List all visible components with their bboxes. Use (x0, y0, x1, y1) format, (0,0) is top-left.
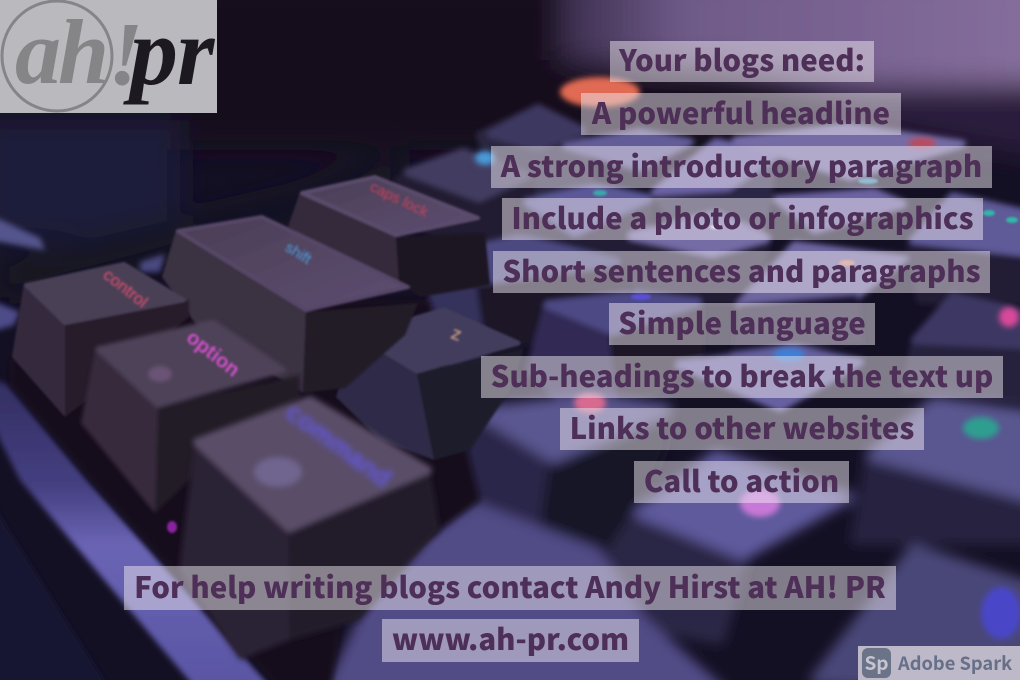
key: shift (162, 217, 418, 393)
logo: ah!pr (0, 0, 217, 113)
blurred background (0, 0, 1020, 300)
item: links: Links to other websites (570, 406, 914, 448)
key: z (336, 310, 524, 460)
key: caps lock (288, 177, 490, 297)
right key field: far row (398, 108, 590, 260)
dark well between keys (10, 300, 480, 680)
badge label: Adobe Spark (898, 650, 1012, 676)
small sharp legends (593, 178, 1018, 300)
key: command (179, 400, 440, 660)
text panel: blog checklist (481, 38, 1003, 503)
legend: z: Z (449, 326, 463, 345)
far-right rows (566, 132, 690, 168)
item: introductory paragraph: A strong introductory paragraph (501, 144, 982, 186)
legend: caps lock: caps lock (367, 178, 431, 221)
legend: control: control (100, 265, 151, 312)
contact line: For help writing blogs contact Andy Hirst at AH! PR (134, 565, 886, 607)
legend: shift: shift (282, 239, 315, 268)
badge: Adobe Spark (858, 646, 1020, 680)
website address: www.ah-pr.com (392, 617, 629, 659)
logo wordmark (15, 0, 216, 105)
blurred coloured legends (475, 77, 1020, 639)
icon: Sp: Sp (864, 649, 889, 676)
key: option (81, 322, 300, 513)
logo wordmark: pr (123, 0, 216, 105)
logo ring (2, 1, 112, 111)
key legends (100, 178, 463, 493)
item: sub-headings: Sub-headings to break the text up (491, 354, 993, 396)
item: photo or infographics: Include a photo or infographics (511, 196, 974, 238)
key: control (12, 264, 189, 417)
legend: command: command (280, 397, 397, 493)
logo wordmark: ! (108, 5, 143, 104)
item: headline: A powerful headline (592, 91, 890, 133)
legend: option: option (182, 327, 244, 382)
keyboard frame bar (0, 378, 273, 680)
heading: Your blogs need: Your blogs need: (619, 38, 865, 80)
item: short sentences: Short sentences and paragraphs (502, 249, 981, 291)
logo wordmark: ah (15, 1, 106, 103)
near key field (330, 399, 1020, 680)
item: call to action: Call to action (644, 459, 839, 501)
item: simple language: Simple language (618, 301, 866, 343)
